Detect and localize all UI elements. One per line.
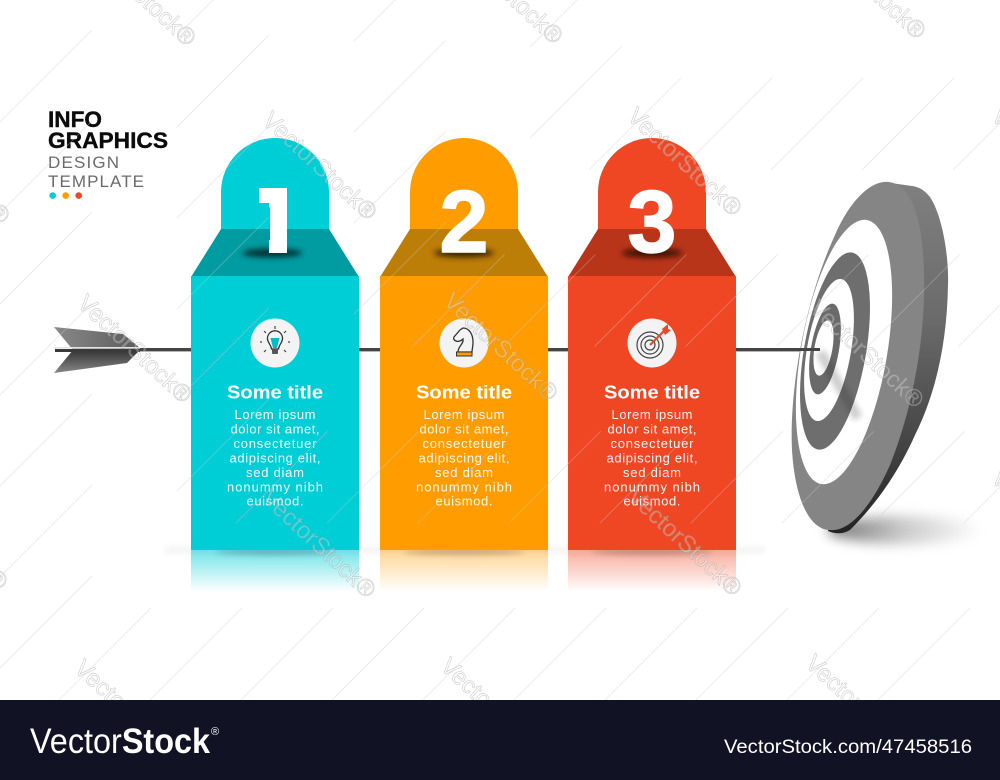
heading: Some title — [227, 382, 323, 402]
arrow tip shadow on target — [820, 352, 858, 418]
shoulder — [191, 229, 359, 277]
body text: Lorem ipsum — [424, 407, 504, 422]
reflection — [191, 550, 359, 592]
body text — [416, 407, 512, 508]
body — [380, 276, 548, 550]
number: 3 — [628, 172, 676, 271]
base shadow — [592, 549, 712, 555]
dome — [410, 138, 518, 229]
body text: nonummy nibh — [416, 480, 512, 494]
watermarks: VectorStock® — [804, 295, 929, 414]
arrow tip — [770, 348, 820, 351]
arrow shaft — [130, 348, 820, 351]
reflection — [568, 550, 736, 592]
body text: consectetuer — [610, 436, 694, 451]
arrow fletching — [54, 327, 140, 373]
body text: nonummy nibh — [604, 480, 700, 494]
body text: consectetuer — [422, 436, 506, 451]
watermarks: VectorStock® — [72, 290, 197, 409]
body text: adipiscing elit, — [230, 450, 320, 466]
body text: euismod. — [246, 494, 304, 508]
number: 1 — [253, 172, 301, 271]
footer logo: VectorStock — [30, 722, 210, 761]
dome — [598, 138, 706, 229]
watermarks: VectorStock® — [256, 485, 381, 604]
title block: INFO — [48, 107, 102, 132]
panel 1: teal column — [191, 138, 359, 592]
watermarks: VectorStock® — [257, 107, 382, 226]
target rings — [779, 213, 909, 491]
watermarks: VectorStock® — [438, 288, 563, 407]
body text: consectetuer — [234, 436, 317, 451]
number — [259, 188, 287, 253]
panel 2: orange column — [380, 138, 548, 592]
target board — [779, 182, 983, 544]
title block: GRAPHICS — [48, 128, 168, 153]
target ground shadow — [827, 516, 983, 544]
body text: Lorem ipsum — [612, 407, 692, 422]
base shadow — [404, 549, 524, 555]
body text: euismod. — [624, 494, 680, 508]
target face — [792, 182, 924, 530]
body text: sed diam — [435, 465, 493, 480]
body text — [604, 407, 700, 508]
icon circle: target — [628, 318, 676, 368]
body text: euismod. — [436, 494, 492, 508]
watermarks: VectorStock® — [622, 483, 747, 602]
body text: dolor sit amet, — [608, 422, 696, 436]
body text — [227, 407, 323, 508]
heading: Some title — [416, 382, 512, 402]
watermarks: VectorStock® — [435, 653, 560, 772]
registered mark: ® — [211, 726, 219, 738]
body — [568, 276, 736, 550]
body text: Lorem ipsum — [234, 407, 316, 422]
body text: nonummy nibh — [227, 480, 323, 494]
watermarks: VectorStock® — [69, 655, 194, 774]
reflection — [380, 550, 548, 592]
number shadow — [242, 248, 302, 258]
body text: dolor sit amet, — [230, 422, 320, 436]
shoulder — [380, 229, 548, 277]
footer url: VectorStock.com/47458516 — [724, 737, 972, 758]
watermarks: VectorStock® — [800, 650, 925, 769]
number shadow — [622, 248, 682, 258]
icon circle: light bulb — [250, 318, 300, 368]
shoulder — [568, 229, 736, 277]
floor shadow line — [165, 546, 765, 554]
body — [191, 276, 359, 550]
body text: sed diam — [623, 465, 681, 480]
number shadow — [434, 248, 494, 258]
footer band — [0, 700, 1000, 780]
body text: dolor sit amet, — [420, 422, 508, 436]
base shadow — [215, 549, 335, 555]
body text: adipiscing elit, — [418, 450, 510, 466]
title block: DESIGN — [48, 153, 119, 172]
watermarks: VectorStock® — [622, 103, 747, 222]
title block — [48, 107, 168, 199]
title block: TEMPLATE — [48, 172, 144, 191]
heading: Some title — [604, 382, 700, 402]
dome — [221, 138, 329, 229]
panel 3: red column — [568, 138, 736, 592]
icon circle: chess knight — [440, 318, 488, 368]
body text: sed diam — [246, 465, 304, 480]
target side — [828, 182, 948, 533]
body text: adipiscing elit, — [606, 450, 698, 466]
number: 2 — [440, 172, 488, 271]
